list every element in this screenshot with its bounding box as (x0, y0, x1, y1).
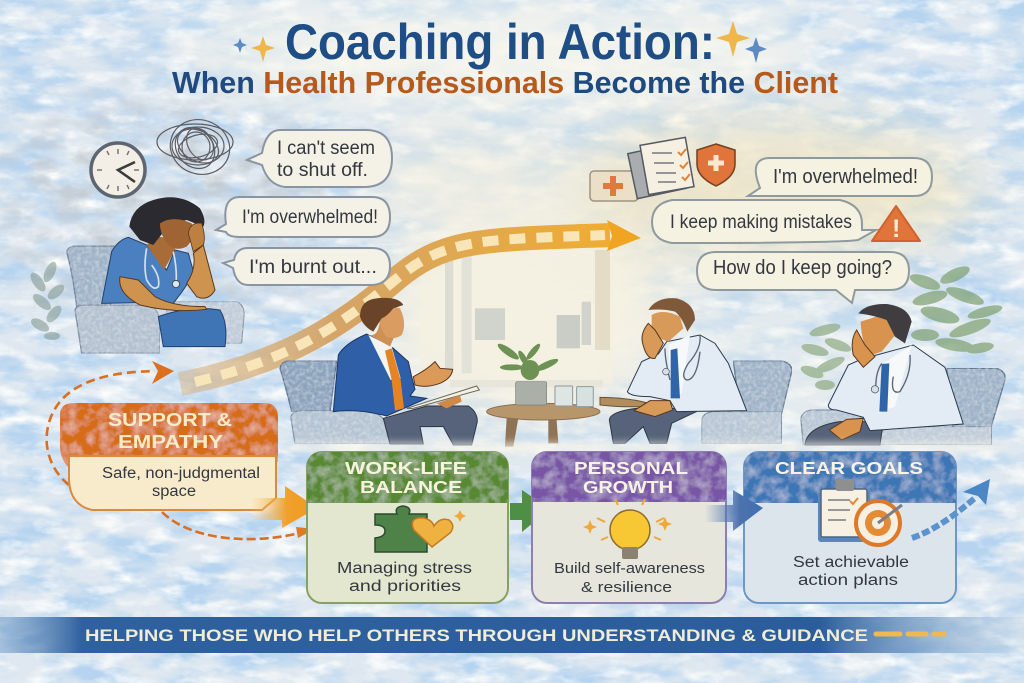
speech bubble: burnt out: I'm burnt out... (249, 257, 377, 278)
arrow: green to purple (510, 490, 550, 532)
text: action plans (793, 554, 909, 589)
speech bubble: overwhelmed right (748, 158, 932, 196)
text: self-awareness: Build self-awareness (554, 560, 705, 577)
arrow: dashed left loop to road (47, 361, 174, 485)
heading: work-life balance: BALANCE (360, 477, 462, 497)
speech bubble: mistakes: I keep making mistakes (670, 211, 852, 233)
speech bubble: keep going: How do I keep going? (713, 257, 892, 279)
speech bubble: shut off: to shut off. (277, 160, 368, 181)
icon: medical clutter (590, 137, 735, 201)
icon: light bulb (583, 499, 672, 559)
text: safe space: Safe, non-judgmental (102, 465, 260, 482)
heading: personal growth: GROWTH (583, 477, 673, 497)
icon: sparkles right (716, 21, 767, 63)
heading: support and empathy: SUPPORT & (108, 410, 232, 430)
text: managing stress: and priorities (349, 578, 461, 595)
icon: warning triangle: ! (892, 215, 900, 243)
speech bubble: burnt out (223, 248, 390, 285)
speech bubble: keep going (697, 252, 909, 303)
speech bubble: shut off (247, 130, 392, 187)
icon: clipboard and target (818, 479, 902, 545)
arrow: orange to green (162, 486, 317, 539)
figure: nurse in chair (67, 197, 244, 353)
figure: coach in chair (280, 298, 479, 445)
window scene (420, 250, 613, 387)
heading: clear goals: CLEAR GOALS (775, 458, 923, 478)
speech bubble: overwhelmed left: I'm overwhelmed! (242, 207, 378, 228)
text: managing stress: Managing stress (337, 560, 472, 577)
text: safe space: space (152, 483, 196, 500)
figure: plant left (28, 260, 67, 340)
title (172, 14, 838, 100)
title: Coaching in Action: (285, 14, 715, 70)
speech bubble: shut off: I can't seem (277, 138, 375, 159)
figure: doctor 1 (600, 298, 792, 443)
icon: tangled thoughts (157, 111, 237, 183)
panel: clear goals (744, 452, 956, 603)
heading: support and empathy (108, 410, 232, 452)
icon: sparkles left (233, 36, 275, 62)
figure: table with plant and glasses (487, 341, 600, 447)
heading: support and empathy: EMPATHY (118, 432, 223, 452)
text: self-awareness (554, 560, 705, 596)
arrow: dashed up right (912, 479, 990, 538)
icon: wall clock (91, 143, 145, 197)
panel: support and empathy (60, 403, 278, 510)
icon: puzzle and heart (375, 506, 466, 552)
text: self-awareness: & resilience (581, 579, 672, 596)
footer banner (0, 617, 1024, 653)
text: action plans: Set achievable (793, 554, 909, 571)
floor glow (285, 443, 1005, 452)
heading: personal growth (574, 458, 688, 497)
icon: warning triangle (872, 206, 920, 243)
heading: work-life balance: WORK-LIFE (345, 458, 467, 478)
figure: plants right (799, 263, 1004, 390)
panel: work-life balance (307, 452, 508, 603)
arrow: purple to blue (705, 490, 763, 531)
heading: work-life balance (345, 458, 467, 497)
text: safe space (102, 465, 260, 500)
heading: personal growth: PERSONAL (574, 458, 688, 478)
text: action plans: action plans (798, 572, 898, 589)
speech bubble: mistakes (652, 200, 876, 243)
arrow: winding road (180, 220, 641, 384)
speech bubble: overwhelmed left (216, 197, 390, 237)
subtitle: When Health Professionals Become the Client (172, 65, 838, 100)
text: managing stress (337, 560, 472, 595)
figure: doctor 2 (801, 304, 1005, 445)
footer banner: HELPING THOSE WHO HELP OTHERS THROUGH UNDERSTANDING & GUIDANCE (85, 626, 868, 645)
panel: personal growth (532, 452, 726, 603)
speech bubble: overwhelmed right: I'm overwhelmed! (773, 166, 918, 188)
